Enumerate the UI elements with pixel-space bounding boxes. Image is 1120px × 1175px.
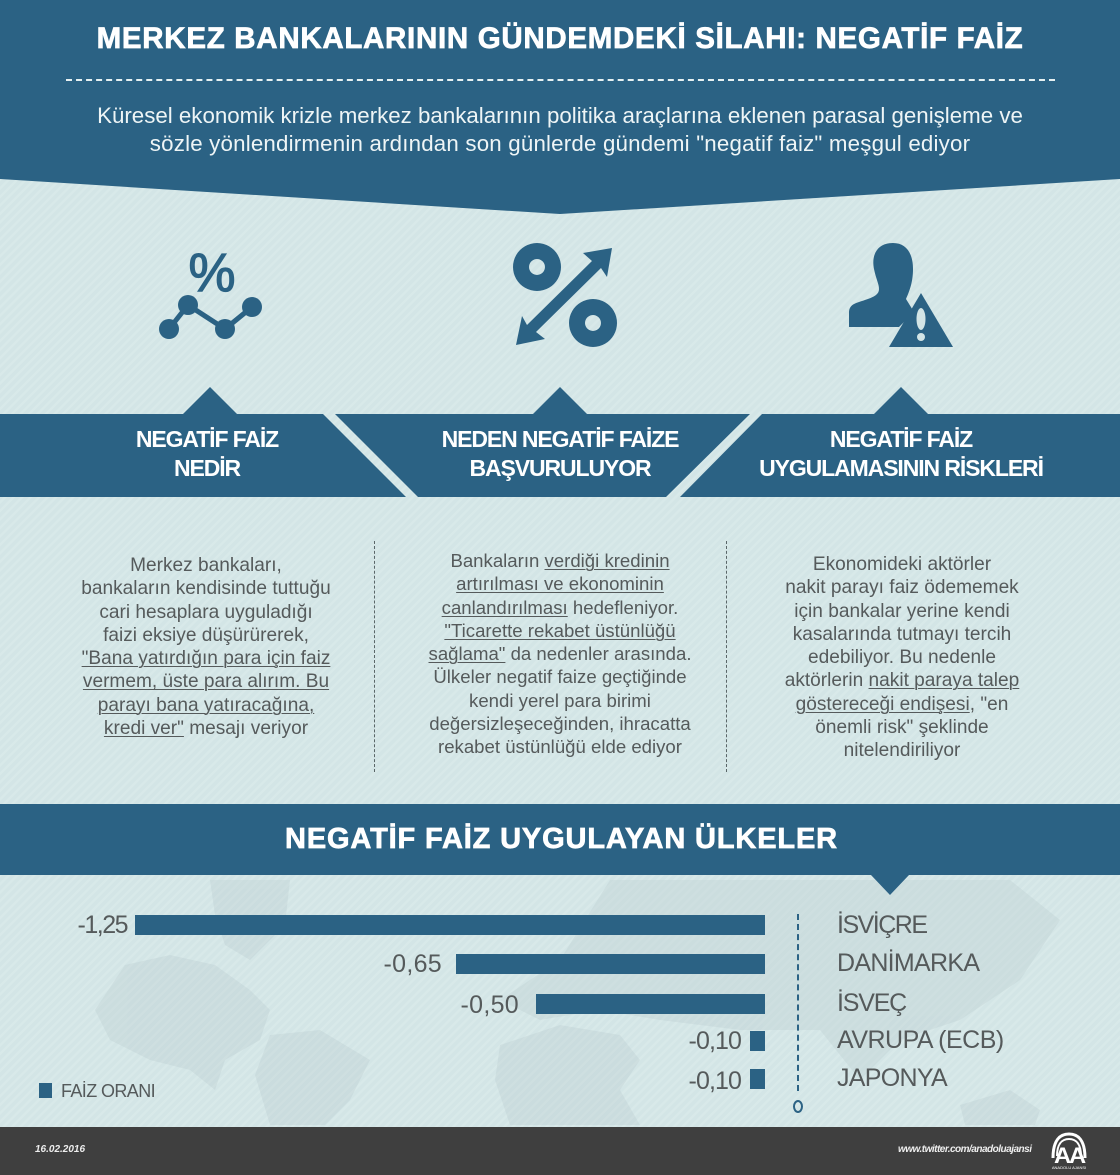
text: column one: parayı bana yatıracağına, (98, 695, 314, 716)
bar row: Danimarka (456, 954, 765, 974)
intro text (97, 103, 1023, 156)
bar chart: İSVİÇRE (837, 911, 927, 939)
bar chart: İSVEÇ (837, 989, 906, 1017)
text: column one: bankaların kendisinde tuttuğu (81, 578, 331, 599)
heading: riskler (759, 426, 1043, 481)
text: column three: için bankalar yerine kendi (794, 601, 1010, 622)
bar chart: DANİMARKA (837, 949, 979, 977)
heading: neden negatif faize: NEDEN NEGATİF FAİZE (442, 426, 678, 452)
heading: negatif faiz nedir: NEGATİF FAİZ (136, 426, 278, 452)
title: MERKEZ BANKALARININ GÜNDEMDEKİ SİLAHI: NEGATİF FAİZ (97, 22, 1023, 55)
icon: AA logo: AA (1054, 1143, 1086, 1168)
bar row: İsviçre (135, 915, 765, 935)
text: column three: Ekonomideki aktörler (813, 554, 991, 575)
text: column three: aktörlerin nakit paraya talep (785, 670, 1019, 691)
intro text: sözle yönlendirmenin ardından son günlerde gündemi "negatif faiz" meşgul ediyor (150, 131, 970, 156)
bar chart: -0,50 (461, 991, 519, 1019)
intro text: Küresel ekonomik krizle merkez bankalarının politika araçlarına eklenen parasal genişleme ve (97, 103, 1023, 128)
heading: negatif faiz nedir (136, 426, 279, 481)
divider (726, 541, 727, 772)
text: column one: kredi ver" mesajı veriyor (104, 718, 308, 739)
heading: riskler: UYGULAMASININ RİSKLERİ (759, 455, 1043, 481)
heading: negatif faiz nedir: NEDİR (174, 455, 240, 481)
text: column three: nitelendiriliyor (844, 740, 960, 761)
text: column three: edebiliyor. Bu nedenle (808, 647, 996, 668)
text: column two: rekabet üstünlüğü elde ediyor (438, 736, 682, 757)
text: column two: artırılması ve ekonominin (456, 573, 664, 594)
header divider (66, 79, 1055, 81)
axis zero (793, 1100, 803, 1113)
text: column two: değersizleşeceğinden, ihracatta (429, 713, 691, 734)
text: column two: sağlama" da nedenler arasında. (429, 643, 691, 664)
text: column three (785, 554, 1020, 761)
heading: neden negatif faize (442, 426, 679, 481)
panel: countries banner (0, 804, 1120, 895)
text: column three: göstereceği endişesi, "en (796, 694, 1008, 715)
text: column one: cari hesaplara uyguladığı (99, 602, 313, 623)
bar chart: JAPONYA (837, 1064, 947, 1092)
text: column one: "Bana yatırdığın para için faiz (82, 648, 330, 669)
bar chart: AVRUPA (ECB) (837, 1026, 1004, 1054)
icon: AA logo (1052, 1132, 1086, 1170)
text: column two: Bankaların verdiği kredinin (450, 550, 670, 571)
bar row: Japonya (750, 1069, 765, 1089)
icon: percent line chart: % (188, 243, 236, 303)
axis line (797, 914, 799, 1091)
text: column two (428, 550, 691, 757)
text: column one: faizi eksiye düşürürerek, (103, 625, 309, 646)
footer (0, 1127, 1120, 1175)
text: column three: önemli risk" şeklinde (815, 717, 989, 738)
text: column two: "Ticarette rekabet üstünlüğü (444, 620, 676, 641)
text: column two: Ülkeler negatif faize geçtiğinde (433, 666, 687, 687)
heading: riskler: NEGATİF FAİZ (830, 426, 972, 452)
text: column three: kasalarında tutmayı tercih (793, 624, 1011, 645)
text: column one: vermem, üste para alırım. Bu (83, 671, 329, 692)
text: column two: kendi yerel para birimi (469, 690, 651, 711)
icon: AA logo: ANADOLU AJANSI (1052, 1165, 1086, 1170)
bar row: Avrupa (750, 1031, 765, 1051)
divider (374, 541, 375, 772)
icon: percent line chart (159, 243, 262, 339)
bar chart: -0,10 (689, 1067, 741, 1095)
text: column three: nakit parayı faiz ödememek (785, 577, 1019, 598)
bar chart: -1,25 (78, 911, 127, 939)
bar chart: -0,65 (384, 950, 442, 978)
bar chart (78, 911, 1004, 1113)
bar row: İsveç (536, 994, 765, 1014)
panel: section banners (0, 387, 1120, 497)
twitter url: www.twitter.com/anadoluajansi (898, 1144, 1032, 1155)
legend: FAİZ ORANI (61, 1081, 155, 1101)
text: column one: Merkez bankaları, (130, 555, 282, 576)
date: 16.02.2016 (35, 1144, 85, 1155)
heading: neden negatif faize: BAŞVURULUYOR (469, 455, 651, 481)
bar chart: -0,10 (689, 1027, 741, 1055)
text: column one (81, 555, 331, 739)
heading: countries: NEGATİF FAİZ UYGULAYAN ÜLKELER (285, 823, 838, 855)
text: column two: canlandırılması hedefleniyor. (442, 597, 678, 618)
icon: percent with arrow (513, 243, 617, 347)
header banner (0, 0, 1120, 214)
icon: person with warning (849, 243, 953, 347)
